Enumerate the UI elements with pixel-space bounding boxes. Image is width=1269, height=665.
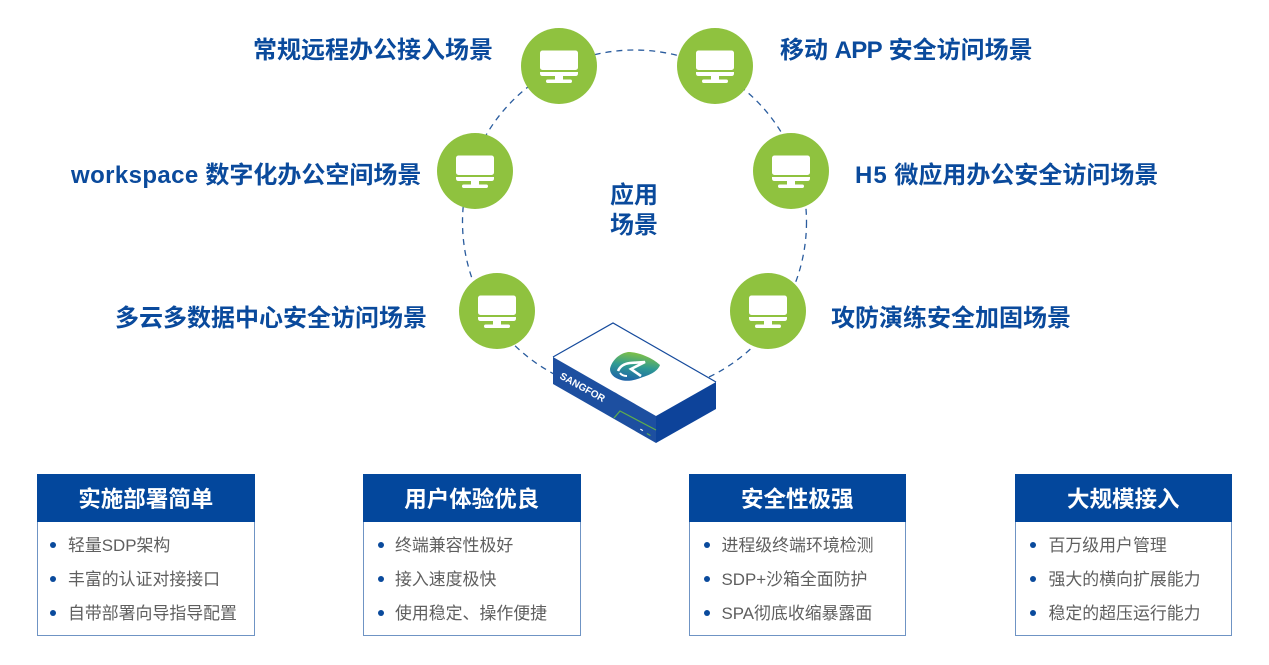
icon: monitor, H5 — [753, 133, 829, 209]
list item: 轻量SDP架构 — [68, 536, 170, 555]
list item: 强大的横向扩展能力 — [1048, 570, 1201, 589]
bullet — [50, 542, 56, 548]
device: SANGFOR appliance: SANGFOR — [558, 371, 607, 405]
bullet — [704, 576, 710, 582]
panel heading — [688, 474, 906, 522]
list item: 自带部署向导指导配置 — [68, 604, 237, 623]
panel heading: 大规模接入 — [1067, 487, 1180, 512]
panel heading — [37, 474, 254, 522]
list item: 接入速度极快 — [395, 570, 496, 589]
list item: 稳定的超压运行能力 — [1048, 604, 1201, 623]
heading: multi-cloud scenario: 多云多数据中心安全访问场景 — [115, 305, 427, 332]
icon: monitor, workspace — [437, 133, 513, 209]
icon: monitor, office access — [521, 28, 597, 104]
panel: simple deployment — [37, 474, 254, 636]
bullet — [704, 610, 710, 616]
bullet — [704, 542, 710, 548]
list item: SPA彻底收缩暴露面 — [722, 604, 872, 623]
heading: H5 scenario: H5 微应用办公安全访问场景 — [855, 162, 1158, 189]
bullet — [1030, 542, 1036, 548]
panel heading — [1014, 474, 1232, 522]
dashed ring — [462, 50, 806, 394]
icon: monitor, attack defense — [730, 273, 806, 349]
panel: user experience — [363, 474, 580, 636]
bullet — [378, 542, 384, 548]
panel heading: 安全性极强 — [741, 487, 854, 512]
panel heading: 用户体验优良 — [404, 487, 539, 512]
diagram: scenario ring with device — [437, 28, 829, 443]
icon: monitor, multi-cloud — [459, 273, 535, 349]
list item: 百万级用户管理 — [1048, 536, 1167, 555]
list item: 使用稳定、操作便捷 — [395, 604, 547, 623]
bullet — [378, 576, 384, 582]
center title: 应用 — [610, 182, 658, 209]
list item: 终端兼容性极好 — [395, 536, 513, 555]
list item: SDP+沙箱全面防护 — [722, 570, 867, 589]
panel heading: 实施部署简单 — [78, 487, 213, 512]
bullet — [378, 610, 384, 616]
bullet — [50, 576, 56, 582]
heading: mobile app scenario: 移动 APP 安全访问场景 — [780, 37, 1033, 64]
icon: monitor, mobile app — [677, 28, 753, 104]
icon: logo shield — [610, 352, 660, 381]
list item: 丰富的认证对接接口 — [68, 570, 220, 589]
bullet — [1030, 576, 1036, 582]
center title: 场景 — [610, 212, 658, 239]
panel heading — [363, 474, 580, 522]
device: SANGFOR appliance — [553, 323, 716, 443]
heading: attack defense scenario: 攻防演练安全加固场景 — [831, 305, 1071, 332]
panel: large-scale access — [1014, 474, 1232, 636]
center title — [610, 182, 658, 239]
bullet — [50, 610, 56, 616]
bullet — [1030, 610, 1036, 616]
list item: 进程级终端环境检测 — [722, 536, 874, 555]
panel: strong security — [688, 474, 906, 636]
heading: office access scenario: 常规远程办公接入场景 — [253, 37, 493, 64]
heading: workspace scenario: workspace 数字化办公空间场景 — [71, 162, 421, 189]
